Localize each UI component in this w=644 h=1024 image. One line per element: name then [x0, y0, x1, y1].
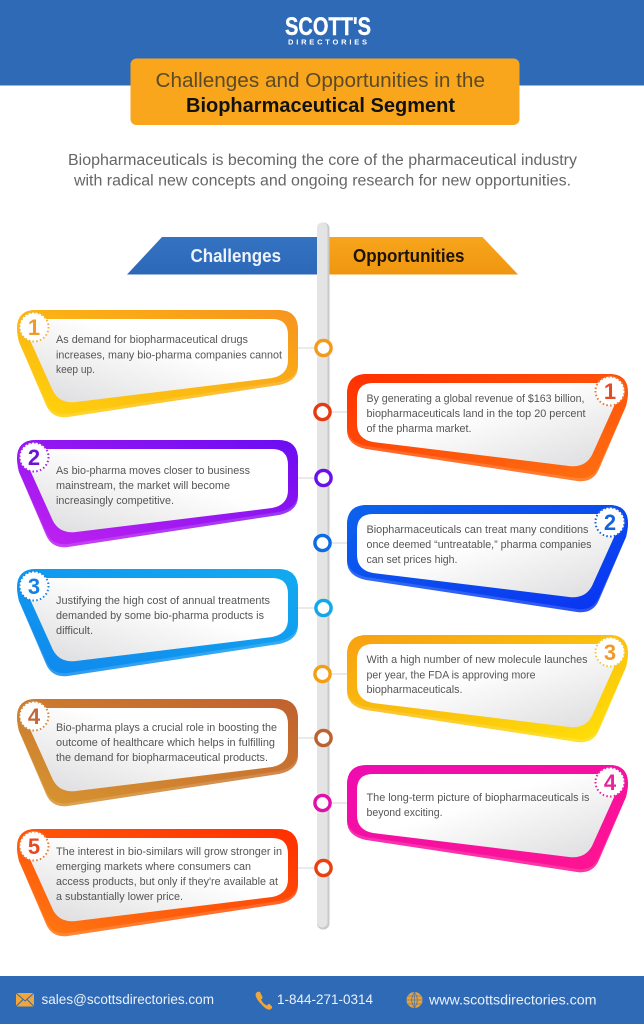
challenge card 3 [17, 569, 298, 676]
title box [130, 58, 520, 125]
opportunity card 2: Biopharmaceuticals can treat many conditions [366, 524, 589, 536]
challenge card 2: mainstream, the market will become [56, 480, 230, 492]
heading ribbon: Challenges: Challenges [190, 246, 281, 266]
footer email: sales@scottsdirectories.com [42, 992, 214, 1007]
opportunity card 1: of the pharma market. [366, 423, 472, 435]
challenge card 5 [17, 829, 298, 936]
timeline nodes [315, 340, 331, 876]
footer website: www.scottsdirectories.com [428, 992, 596, 1008]
challenge card 1: increases, many bio-pharma companies cannot [56, 350, 282, 362]
logo [285, 13, 371, 46]
intro text: with radical new concepts and ongoing research for new opportunities. [73, 172, 571, 190]
challenge card 5: The interest in bio-similars will grow stronger in [56, 846, 282, 858]
challenge card 2 [17, 440, 298, 547]
opportunity card 1 [347, 374, 628, 481]
challenge card 5: 5 [28, 834, 40, 859]
opportunity card 1: By generating a global revenue of $163 billion, [366, 393, 584, 405]
heading ribbon: Challenges [127, 237, 318, 274]
opportunity card 4: The long-term picture of biopharmaceuticals is [366, 792, 590, 804]
challenge card 3: demanded by some bio-pharma products is [56, 610, 264, 622]
footer phone: 1-844-271-0314 [277, 992, 373, 1007]
opportunity card 3: 3 [604, 640, 616, 665]
footer band [0, 976, 644, 1024]
opportunity card 1: biopharmaceuticals land in the top 20 percent [366, 408, 586, 420]
intro text: Biopharmaceuticals is becoming the core of the pharmaceutical industry [68, 152, 577, 169]
heading ribbon: Opportunities: Opportunities [353, 246, 464, 266]
opportunity card 3: With a high number of new molecule launches [366, 654, 588, 666]
challenge card 1: 1 [28, 315, 40, 340]
icon: phone [256, 992, 272, 1010]
challenge card 1 [17, 310, 298, 417]
logo: SCOTT'S [285, 13, 371, 41]
challenge card 4: outcome of healthcare which helps in fulfilling [56, 737, 275, 749]
icon: globe [406, 992, 422, 1008]
challenge card 4: 4 [28, 704, 41, 729]
heading ribbon: Opportunities [328, 237, 518, 274]
challenge card 1: As demand for biopharmaceutical drugs [56, 334, 248, 346]
challenge card 3: 3 [28, 574, 40, 599]
opportunity card 3 [347, 635, 628, 742]
challenge card 3: difficult. [56, 625, 93, 637]
challenge card 4 [17, 699, 298, 806]
challenge card 5: emerging markets where consumers can [56, 861, 251, 873]
opportunity card 1: 1 [604, 379, 616, 404]
opportunity card 4: beyond exciting. [366, 807, 442, 819]
opportunity card 3: per year, the FDA is approving more [366, 670, 536, 682]
opportunity card 3: biopharmaceuticals. [366, 684, 462, 696]
opportunity card 4 [347, 765, 628, 872]
header band [0, 0, 644, 86]
challenge card 2: increasingly competitive. [56, 495, 174, 507]
opportunity card 2: once deemed “untreatable,” pharma companies [366, 539, 592, 551]
title box: Challenges and Opportunities in the [156, 69, 485, 92]
timeline bar [317, 222, 330, 930]
challenge card 5: a substantially lower price. [56, 891, 183, 903]
intro text [68, 152, 577, 190]
challenge card 1: keep up. [56, 364, 95, 376]
logo: DIRECTORIES [288, 38, 367, 46]
opportunity card 2: can set prices high. [366, 554, 458, 566]
opportunity card 2: 2 [604, 510, 616, 535]
challenge card 5: access products, but only if they're available at [56, 876, 278, 888]
challenge card 2: 2 [28, 445, 40, 470]
icon: mail [16, 993, 34, 1006]
timeline connectors [298, 348, 347, 868]
opportunity card 4: 4 [604, 770, 617, 795]
opportunity card 2 [347, 505, 628, 612]
challenge card 2: As bio-pharma moves closer to business [56, 465, 250, 477]
challenge card 4: the demand for biopharmaceutical products. [56, 752, 268, 764]
challenge card 4: Bio-pharma plays a crucial role in boosting the [56, 722, 277, 734]
challenge card 3: Justifying the high cost of annual treatments [56, 595, 270, 607]
title box: Biopharmaceutical Segment [186, 94, 455, 117]
